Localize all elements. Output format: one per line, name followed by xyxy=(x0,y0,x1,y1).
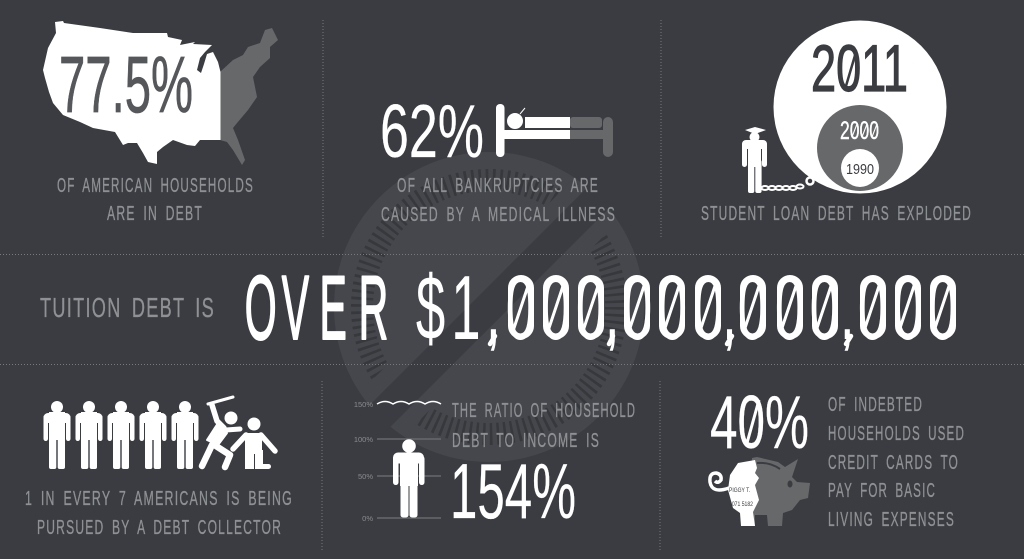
stat: over one trillion dollars: $1,000,000,000,000 xyxy=(416,257,957,359)
panel: student loan debt xyxy=(701,20,972,225)
chart: person against debt water level: 0% xyxy=(362,514,373,523)
stat: 77.5%: 77.5% xyxy=(59,40,193,129)
icon: patient in bed xyxy=(496,104,613,157)
caption: 1 in every 7 americans xyxy=(25,488,293,539)
caption: of american households are in debt: ARE IN DEBT xyxy=(107,203,203,225)
icon: graduate chained to debt ball xyxy=(742,127,814,193)
caption: indebted households used credit cards: PAY FOR BASIC xyxy=(828,480,936,502)
icon: piggy bank credit card: PIGGY T. xyxy=(729,488,750,494)
chart: nested debt circles: 2011 xyxy=(811,31,908,105)
chart: person against debt water level: 100% xyxy=(354,435,373,444)
chart: person against debt water level: 150% xyxy=(354,400,373,409)
chart: nested debt circles xyxy=(774,20,946,194)
stat: 40%: 40% xyxy=(710,380,809,464)
icon: piggy bank credit card xyxy=(710,457,810,526)
caption: of american households are in debt xyxy=(57,175,254,225)
label: tuition debt is: TUITION DEBT IS xyxy=(40,292,215,323)
stat: over one trillion dollars: OVER xyxy=(245,256,388,358)
chart: person against debt water level xyxy=(354,400,441,523)
caption: bankruptcies caused by medical illness: OF ALL BANKRUPTCIES ARE xyxy=(397,175,599,197)
chart: person against debt water level: 50% xyxy=(358,472,373,481)
caption: ratio of household debt to income: THE RATIO OF HOUSEHOLD xyxy=(452,400,636,422)
caption: 1 in every 7 americans: 1 IN EVERY 7 AMERICANS IS BEING xyxy=(25,488,293,510)
caption: indebted households used credit cards xyxy=(828,394,965,531)
caption: bankruptcies caused by medical illness: CAUSED BY A MEDICAL ILLNESS xyxy=(381,204,616,226)
icon: debt collector attacking a kneeling person xyxy=(202,397,275,469)
chart: nested debt circles: 2000 xyxy=(840,117,879,145)
icon: map of the United States xyxy=(43,21,278,165)
stat: 154%: 154% xyxy=(450,447,576,535)
caption: of american households are in debt: OF AMERICAN HOUSEHOLDS xyxy=(57,175,254,197)
panel: debt to income ratio xyxy=(354,400,636,535)
caption: 1 in every 7 americans: PURSUED BY A DEBT COLLECTOR xyxy=(37,517,282,539)
panel: tuition debt banner xyxy=(40,256,957,359)
stat: 40% xyxy=(710,380,809,464)
caption: ratio of household debt to income xyxy=(452,400,636,452)
chart: nested debt circles: 1990 xyxy=(846,161,874,178)
caption: indebted households used credit cards: OF INDEBTED xyxy=(828,394,923,416)
icon: piggy bank credit card: 0071 5182 xyxy=(729,502,754,508)
caption: ratio of household debt to income: DEBT TO INCOME IS xyxy=(452,430,600,452)
caption: bankruptcies caused by medical illness xyxy=(381,175,616,226)
panel: debt collectors xyxy=(25,397,293,539)
panel: credit cards xyxy=(710,380,965,531)
background no-symbol watermark xyxy=(334,152,644,462)
stat: 62%: 62% xyxy=(380,89,484,173)
panel: american households in debt xyxy=(43,21,278,225)
icon: row of five people xyxy=(44,401,198,469)
panel: bankruptcies xyxy=(380,89,616,226)
